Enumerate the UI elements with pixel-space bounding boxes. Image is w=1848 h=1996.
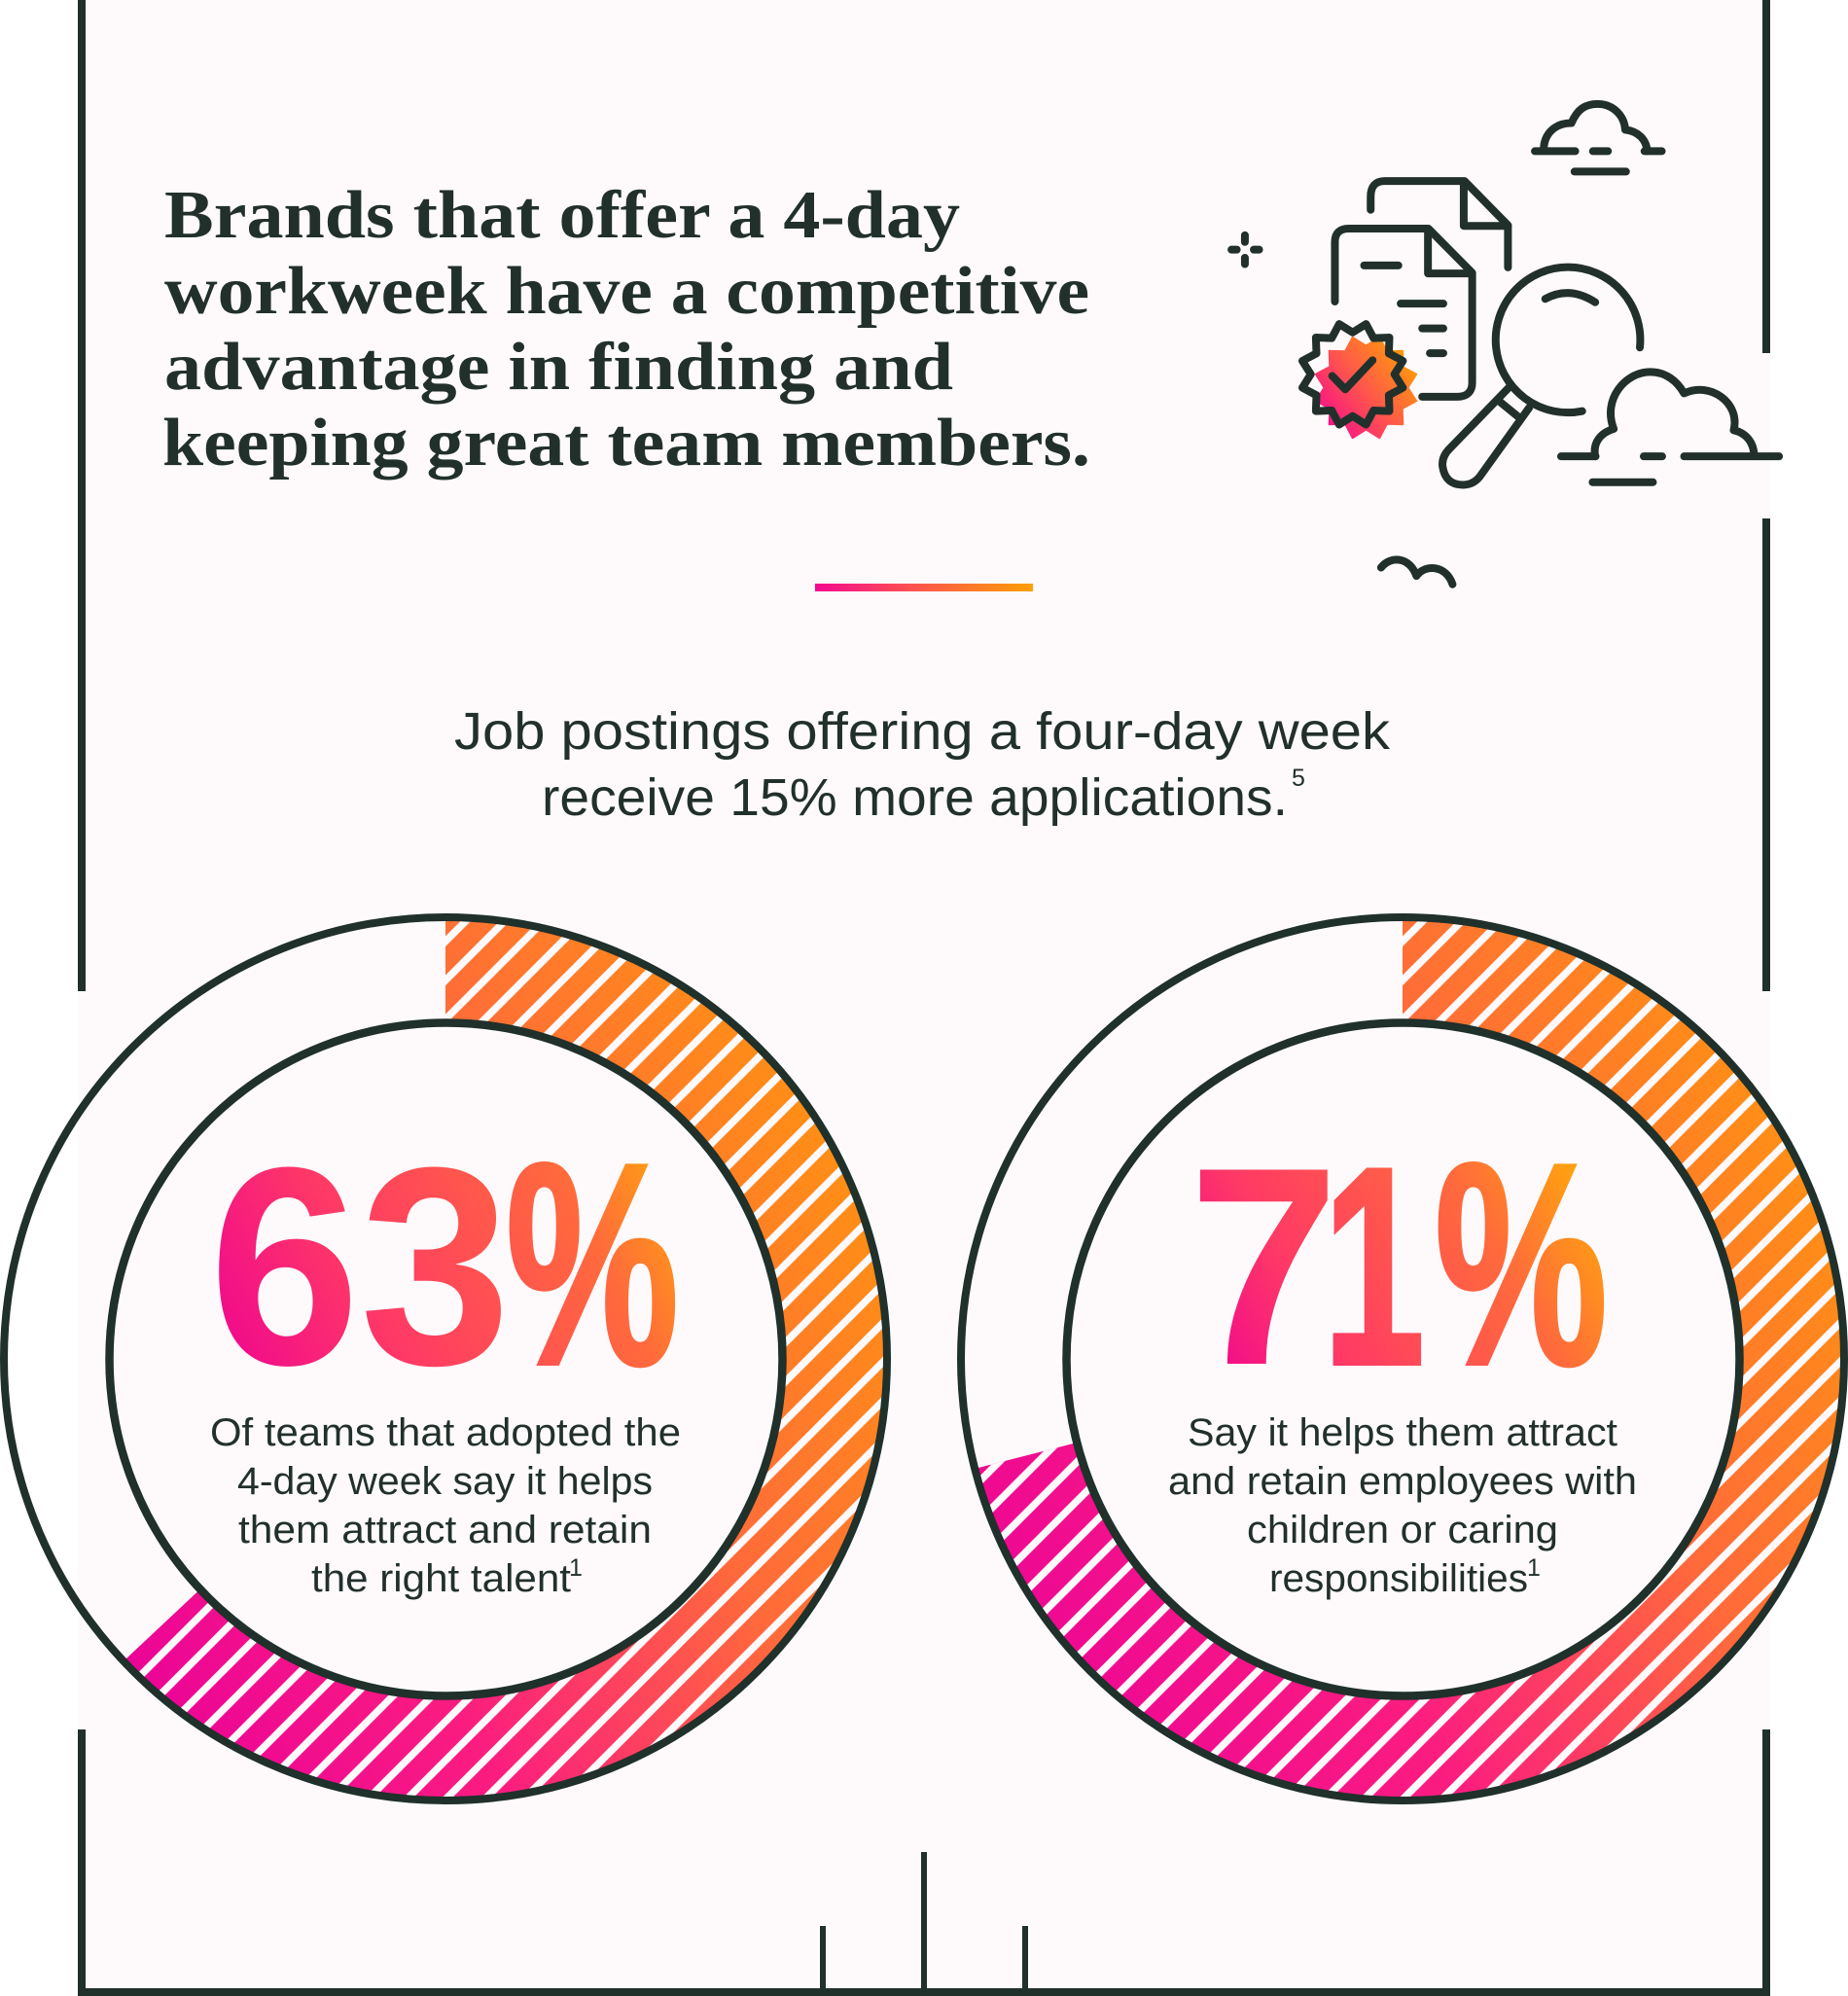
description: them attract and retain	[238, 1509, 652, 1551]
value: %	[506, 1103, 679, 1425]
value	[209, 1103, 679, 1425]
ring segment	[126, 921, 883, 1797]
description: Of teams that adopted the	[210, 1411, 681, 1454]
value: 63	[209, 1109, 511, 1424]
subheading: Job postings offering a four-day week	[454, 702, 1391, 761]
ring outlines	[961, 917, 1844, 1800]
description: 1	[569, 1554, 583, 1582]
description: responsibilities	[1269, 1557, 1528, 1600]
donut chart: 71%	[957, 905, 1848, 1809]
icon: badge outline	[1302, 324, 1403, 424]
ring outlines	[4, 917, 887, 1800]
description	[1168, 1411, 1637, 1600]
description: children or caring	[1247, 1509, 1558, 1551]
value: %	[1435, 1103, 1608, 1425]
divider	[815, 584, 1033, 591]
subheading	[454, 702, 1391, 827]
donut chart: 63%	[0, 905, 905, 1809]
ring segment	[957, 905, 1848, 1809]
description: and retain employees with	[1168, 1460, 1637, 1503]
illustration: documents, magnifier, badge and clouds	[1231, 104, 1779, 585]
heading	[162, 178, 1090, 481]
value	[1189, 1103, 1608, 1425]
description: 4-day week say it helps	[237, 1460, 653, 1503]
heading: Brands that offer a 4-day	[164, 178, 960, 253]
heading: keeping great team members.	[162, 406, 1090, 481]
icon: line art	[1231, 104, 1779, 585]
description: the right talent	[311, 1557, 571, 1600]
description: 1	[1527, 1554, 1541, 1582]
value: 1	[1323, 1109, 1425, 1424]
subheading: receive 15% more applications.	[542, 768, 1288, 827]
footnote marker: 5	[1292, 765, 1305, 792]
description: Say it helps them attract	[1188, 1411, 1617, 1454]
heading: workweek have a competitive	[164, 254, 1089, 329]
description	[210, 1411, 681, 1600]
icon: gradient badge	[1316, 338, 1416, 438]
value: 7	[1189, 1109, 1339, 1424]
heading: advantage in finding and	[164, 330, 953, 405]
